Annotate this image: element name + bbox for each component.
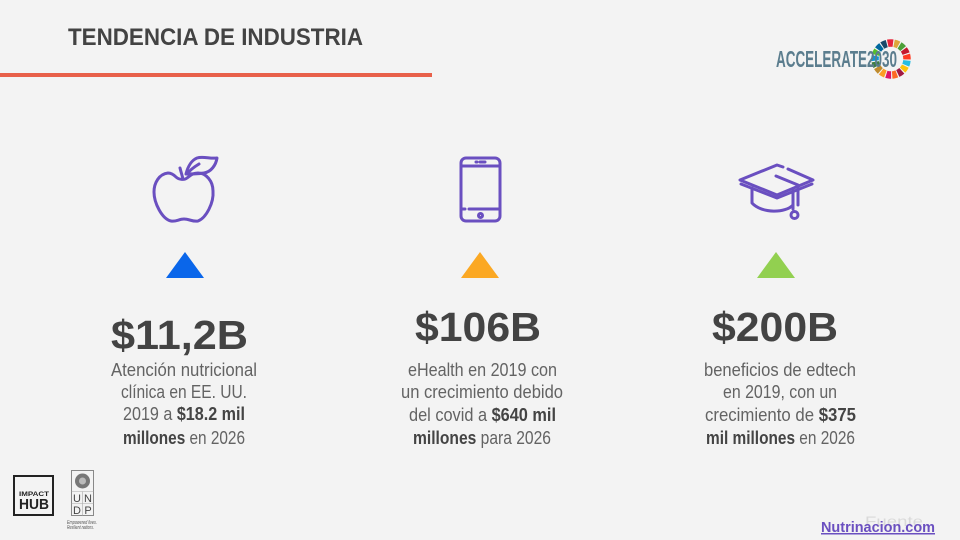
description: en 2019, con un <box>723 381 837 402</box>
description: del covid a $640 mil <box>409 404 556 425</box>
logo: UNDP: P <box>84 505 92 517</box>
trend arrow: blue <box>166 252 204 278</box>
logo: Impact Hub <box>14 476 53 515</box>
logo: Accelerate 2030 <box>776 40 910 78</box>
trend arrow: orange <box>461 252 499 278</box>
logo: UNDP: Resilient nations. <box>67 525 94 531</box>
icon: SDG colour wheel <box>872 40 910 78</box>
title: TENDENCIA DE INDUSTRIA <box>68 24 363 51</box>
description: clínica en EE. UU. <box>121 381 247 402</box>
value: $11,2B <box>111 312 248 358</box>
description <box>111 359 257 448</box>
description: millones en 2026 <box>123 427 245 448</box>
column: edtech <box>704 165 856 448</box>
source link: Nutrinacion.com <box>821 519 935 536</box>
logo: UNDP: N <box>84 493 92 505</box>
logo: UNDP: D <box>73 505 81 517</box>
description: crecimiento de $375 <box>705 404 856 425</box>
logo: Impact Hub: IMPACT <box>19 491 49 498</box>
description <box>704 359 856 448</box>
description: un crecimiento debido <box>401 381 563 402</box>
faded source label: Fuente <box>865 513 923 529</box>
description: eHealth en 2019 con <box>408 359 557 380</box>
icon: graduation cap <box>740 165 813 218</box>
icon: smartphone <box>461 158 500 221</box>
column: nutrition <box>111 157 257 448</box>
description: Atención nutricional <box>111 359 257 380</box>
description: millones para 2026 <box>413 427 551 448</box>
icon: apple <box>154 157 217 221</box>
logo: Impact Hub: HUB <box>19 496 49 513</box>
description <box>401 359 563 448</box>
column: ehealth <box>401 158 563 448</box>
description: mil millones en 2026 <box>706 427 855 448</box>
title underline <box>0 73 432 77</box>
value: $200B <box>712 304 838 350</box>
logo: UNDP: Empowered lives. <box>67 520 97 526</box>
description: 2019 a $18.2 mil <box>123 403 245 424</box>
logo: UNDP: U <box>73 493 81 505</box>
description: beneficios de edtech <box>704 359 856 380</box>
trend arrow: green <box>757 252 795 278</box>
logo: UNDP <box>67 470 97 531</box>
value: $106B <box>415 304 541 350</box>
